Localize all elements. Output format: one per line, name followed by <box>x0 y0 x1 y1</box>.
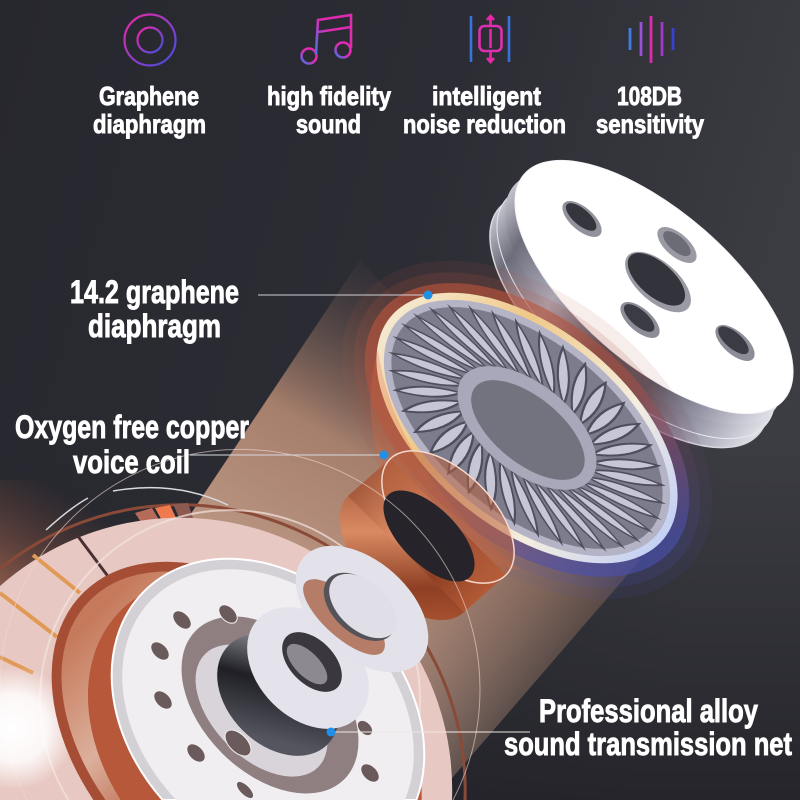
callout: diaphragm <box>70 274 432 344</box>
callout: diaphragm: diaphragm <box>88 308 221 344</box>
callout: voice coil: Oxygen free copper <box>15 409 249 445</box>
plate perforations <box>147 601 383 800</box>
petals <box>348 260 706 596</box>
feature labels: 108DB <box>617 81 682 111</box>
icon: noise reduction <box>471 16 509 62</box>
feature labels <box>93 81 704 139</box>
feature labels: Graphene <box>99 81 199 111</box>
feature labels: noise reduction <box>403 109 566 139</box>
warm tint <box>370 350 520 570</box>
diaphragm glow <box>278 192 776 668</box>
feature labels: sensitivity <box>596 109 704 139</box>
icon: music note <box>302 15 351 64</box>
plate face <box>474 117 800 457</box>
ring face <box>223 583 393 753</box>
alloy plate <box>112 559 424 800</box>
callout: voice coil: voice coil <box>73 444 190 480</box>
diaphragm <box>278 192 776 668</box>
magnet plate <box>449 117 800 491</box>
speaker disc <box>0 449 480 800</box>
feature labels: diaphragm <box>93 109 206 139</box>
pole disc <box>272 521 452 697</box>
icon: concentric circles <box>124 14 176 66</box>
icon: sound wave <box>630 16 673 63</box>
feature labels: high fidelity <box>267 81 391 111</box>
callout: alloy net <box>326 693 792 762</box>
magnet ring <box>193 583 393 780</box>
feature labels: intelligent <box>432 81 541 111</box>
outer ring <box>327 240 727 616</box>
light beam <box>120 260 640 800</box>
plate holes <box>556 195 761 367</box>
callout: voice coil <box>15 409 388 480</box>
voice coil <box>316 427 538 644</box>
callout: diaphragm: 14.2 graphene <box>70 274 239 310</box>
pole pellet <box>311 559 409 654</box>
coil opening <box>368 475 490 597</box>
diaphragm dome <box>436 342 618 514</box>
orange segments <box>135 503 193 530</box>
speaker body <box>52 559 424 800</box>
feature labels: sound <box>296 109 361 139</box>
